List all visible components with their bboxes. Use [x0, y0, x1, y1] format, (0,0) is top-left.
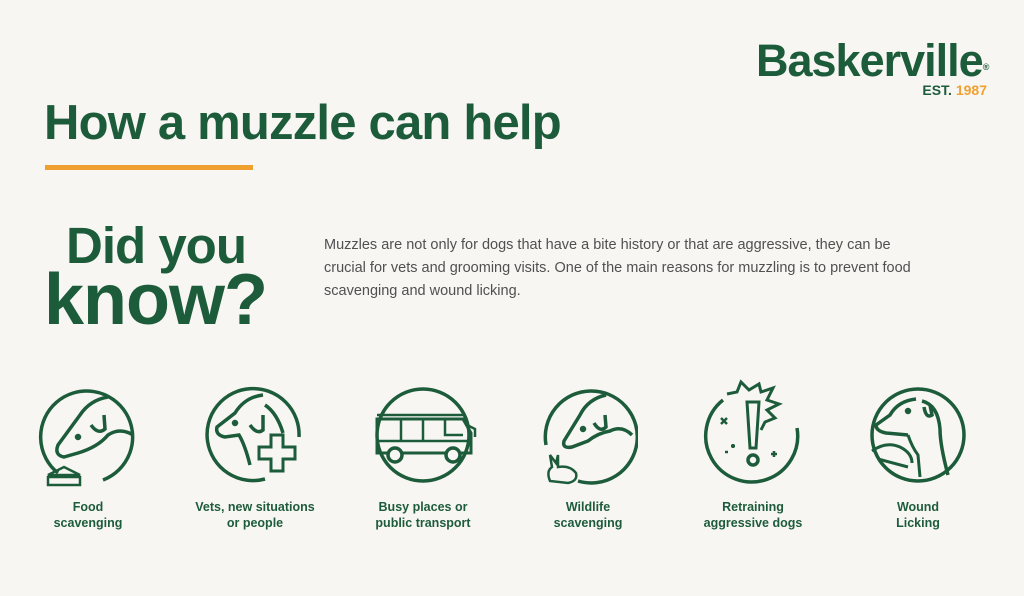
- did you know heading: [44, 217, 267, 340]
- icon: retraining: [704, 380, 800, 484]
- label: wound: Wound: [897, 500, 939, 514]
- paragraph: Muzzles are not only for dogs that have a bite history or that are aggressive, they can be crucial for vets and grooming visits. One of the main reasons for muzzling is to prevent food scavenging and wound licking.: [324, 237, 911, 299]
- logo wordmark: Baskerville®: [756, 35, 988, 86]
- title: How a muzzle can help: [44, 96, 561, 150]
- logo est: EST. 1987: [922, 82, 987, 98]
- icon: bus: [375, 387, 476, 483]
- label: food: [54, 500, 122, 530]
- label: wildlife: scavenging: [554, 516, 622, 530]
- label: wound: [896, 500, 940, 530]
- label: wound: Licking: [896, 516, 940, 530]
- label: food: Food: [73, 500, 103, 514]
- icon: vets: [205, 386, 301, 482]
- label: wildlife: Wildlife: [566, 500, 610, 514]
- label: vets: [195, 500, 315, 530]
- did you know heading: Did you: [66, 217, 246, 274]
- orange underline: [45, 165, 253, 170]
- label: vets: Vets, new situations: [195, 500, 315, 514]
- icon: wound licking: [870, 387, 966, 483]
- label: bus: [375, 500, 471, 530]
- icon: wildlife: [544, 389, 638, 485]
- logo: [756, 35, 990, 98]
- label: bus: public transport: [375, 516, 471, 530]
- label: wildlife: [554, 500, 622, 530]
- label: food: scavenging: [54, 516, 122, 530]
- label: retraining: [704, 500, 802, 530]
- label: bus: Busy places or: [379, 500, 467, 514]
- icon: food scavenging: [38, 389, 134, 486]
- did you know heading: know?: [44, 260, 267, 340]
- label: vets: or people: [227, 516, 283, 530]
- label: retraining: Retraining: [722, 500, 784, 514]
- label: retraining: aggressive dogs: [704, 516, 802, 530]
